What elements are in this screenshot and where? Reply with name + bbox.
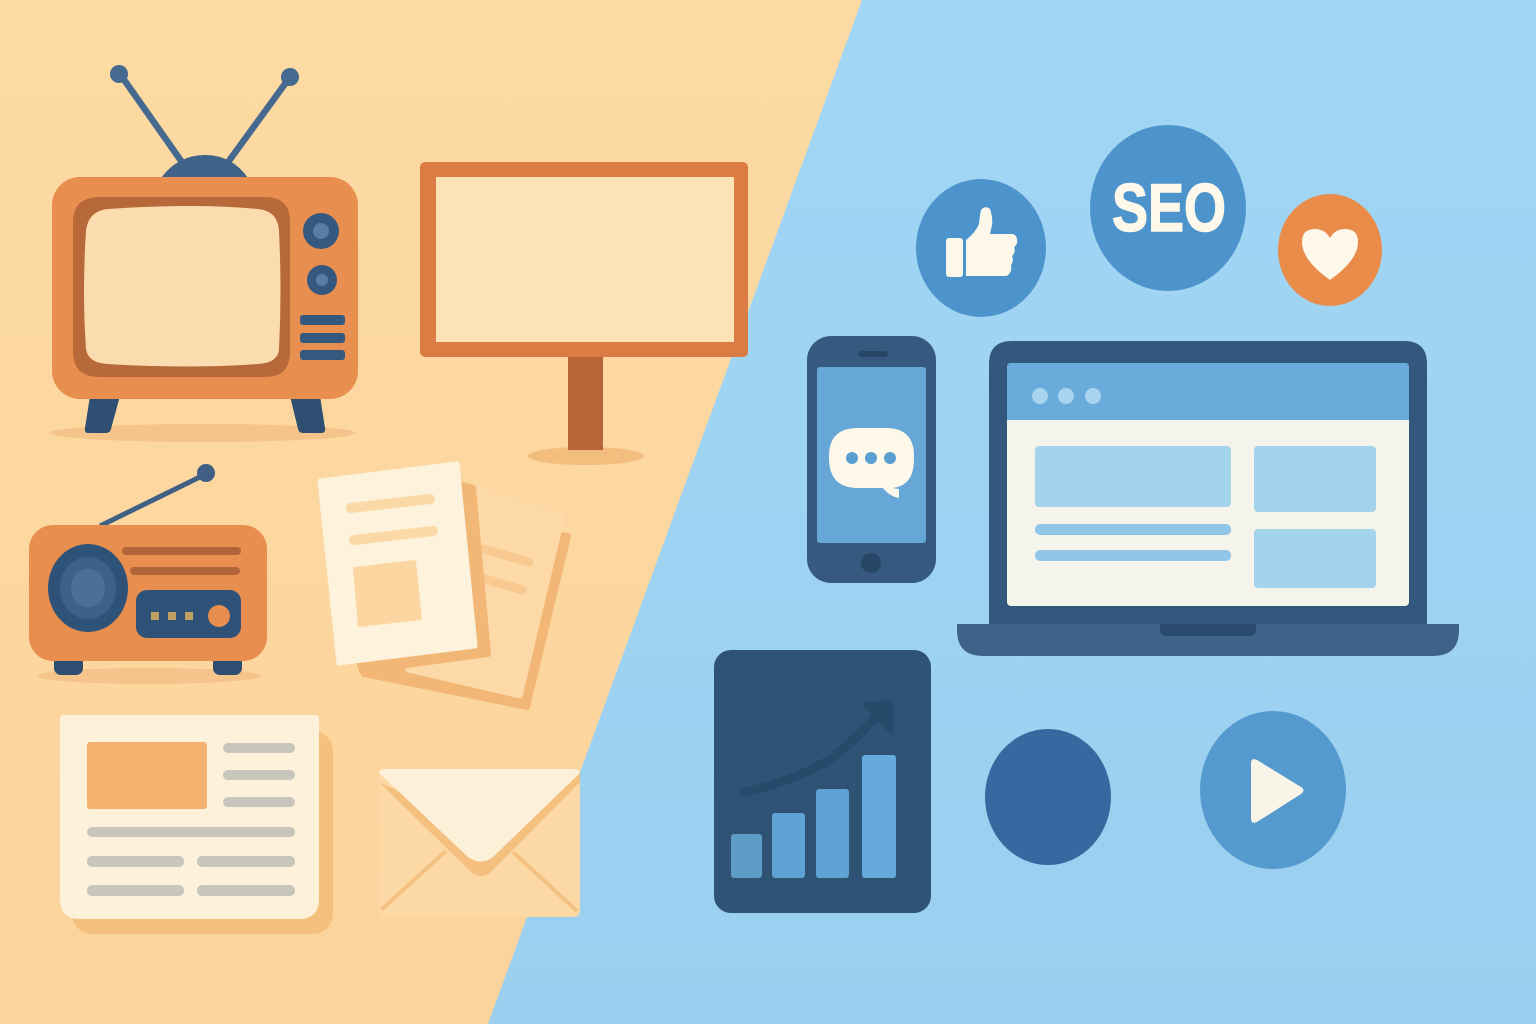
- icon: growth chart: [714, 650, 931, 913]
- icon: newspaper: [60, 715, 333, 934]
- background: traditional side: [0, 0, 862, 1024]
- icon: thumbs up: [916, 179, 1046, 317]
- icon: television: [50, 65, 358, 442]
- icon: billboard: [420, 162, 748, 465]
- icon: heart: [1278, 194, 1382, 306]
- icon: envelope: [379, 769, 580, 917]
- icon: smartphone: [807, 336, 936, 583]
- icon: blue circle: [985, 729, 1111, 865]
- icon: play button: [1200, 711, 1346, 869]
- icon: radio: [29, 464, 267, 684]
- icon: SEO badge: [1090, 125, 1246, 291]
- icon: laptop: [957, 341, 1459, 656]
- icon: flyers: [320, 464, 568, 707]
- icon: SEO badge: SEO: [1112, 170, 1226, 246]
